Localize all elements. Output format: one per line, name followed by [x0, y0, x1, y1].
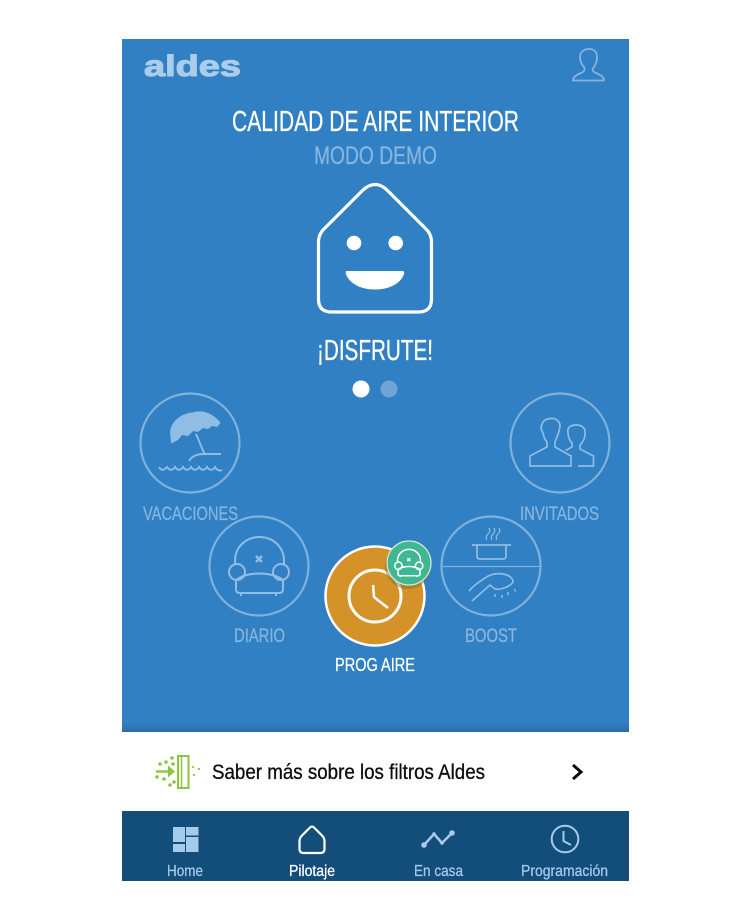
label: en casa: En casa	[414, 863, 463, 880]
panel: blue main screen	[122, 39, 629, 732]
label: programacion: Programación	[521, 863, 608, 880]
label: prog aire: PROG AIRE	[335, 655, 415, 675]
panel: bottom navigation	[122, 811, 629, 881]
icon: air filter	[155, 756, 200, 788]
pagination dots	[352, 380, 398, 398]
label: home: Home	[167, 863, 203, 880]
logo: aldes: aldes	[144, 50, 241, 83]
icon: user profile	[573, 49, 604, 80]
icon: shower head	[469, 574, 516, 601]
icon: armchair	[229, 537, 289, 596]
icon: chevron right	[573, 765, 581, 779]
icon: house	[300, 826, 324, 853]
subtitle: modo demo: MODO DEMO	[314, 142, 437, 170]
label: vacaciones: VACACIONES	[143, 504, 238, 525]
mode button: prog aire (active)	[326, 541, 431, 675]
label: diario: DIARIO	[234, 626, 285, 647]
icon: line chart	[421, 830, 455, 848]
tab: en casa	[414, 830, 463, 880]
icon: two people	[530, 418, 594, 466]
mode button: invitados	[510, 394, 610, 525]
label: invitados: INVITADOS	[520, 504, 599, 525]
text: saber mas: Saber más sobre los filtros Aldes	[212, 761, 485, 784]
status text: disfrute: ¡DISFRUTE!	[317, 335, 433, 367]
tab: programacion	[521, 826, 608, 880]
tab: pilotaje (active)	[289, 826, 335, 880]
icon: cooking pot	[472, 528, 511, 559]
icon: dashboard	[173, 827, 198, 852]
banner: filtros aldes	[122, 732, 629, 811]
mode button: diario	[210, 516, 308, 647]
mode button: boost	[442, 516, 540, 647]
icon: beach umbrella	[159, 411, 222, 471]
label: pilotaje: Pilotaje	[289, 863, 335, 880]
icon: clock	[349, 570, 401, 622]
title: CALIDAD DE AIRE INTERIOR	[232, 106, 519, 138]
badge: armchair	[385, 541, 431, 589]
icon: smiling house	[318, 184, 432, 312]
tab: home	[167, 827, 203, 880]
mode button: vacaciones	[140, 394, 240, 525]
label: boost: BOOST	[465, 626, 517, 647]
icon: clock	[552, 826, 578, 852]
